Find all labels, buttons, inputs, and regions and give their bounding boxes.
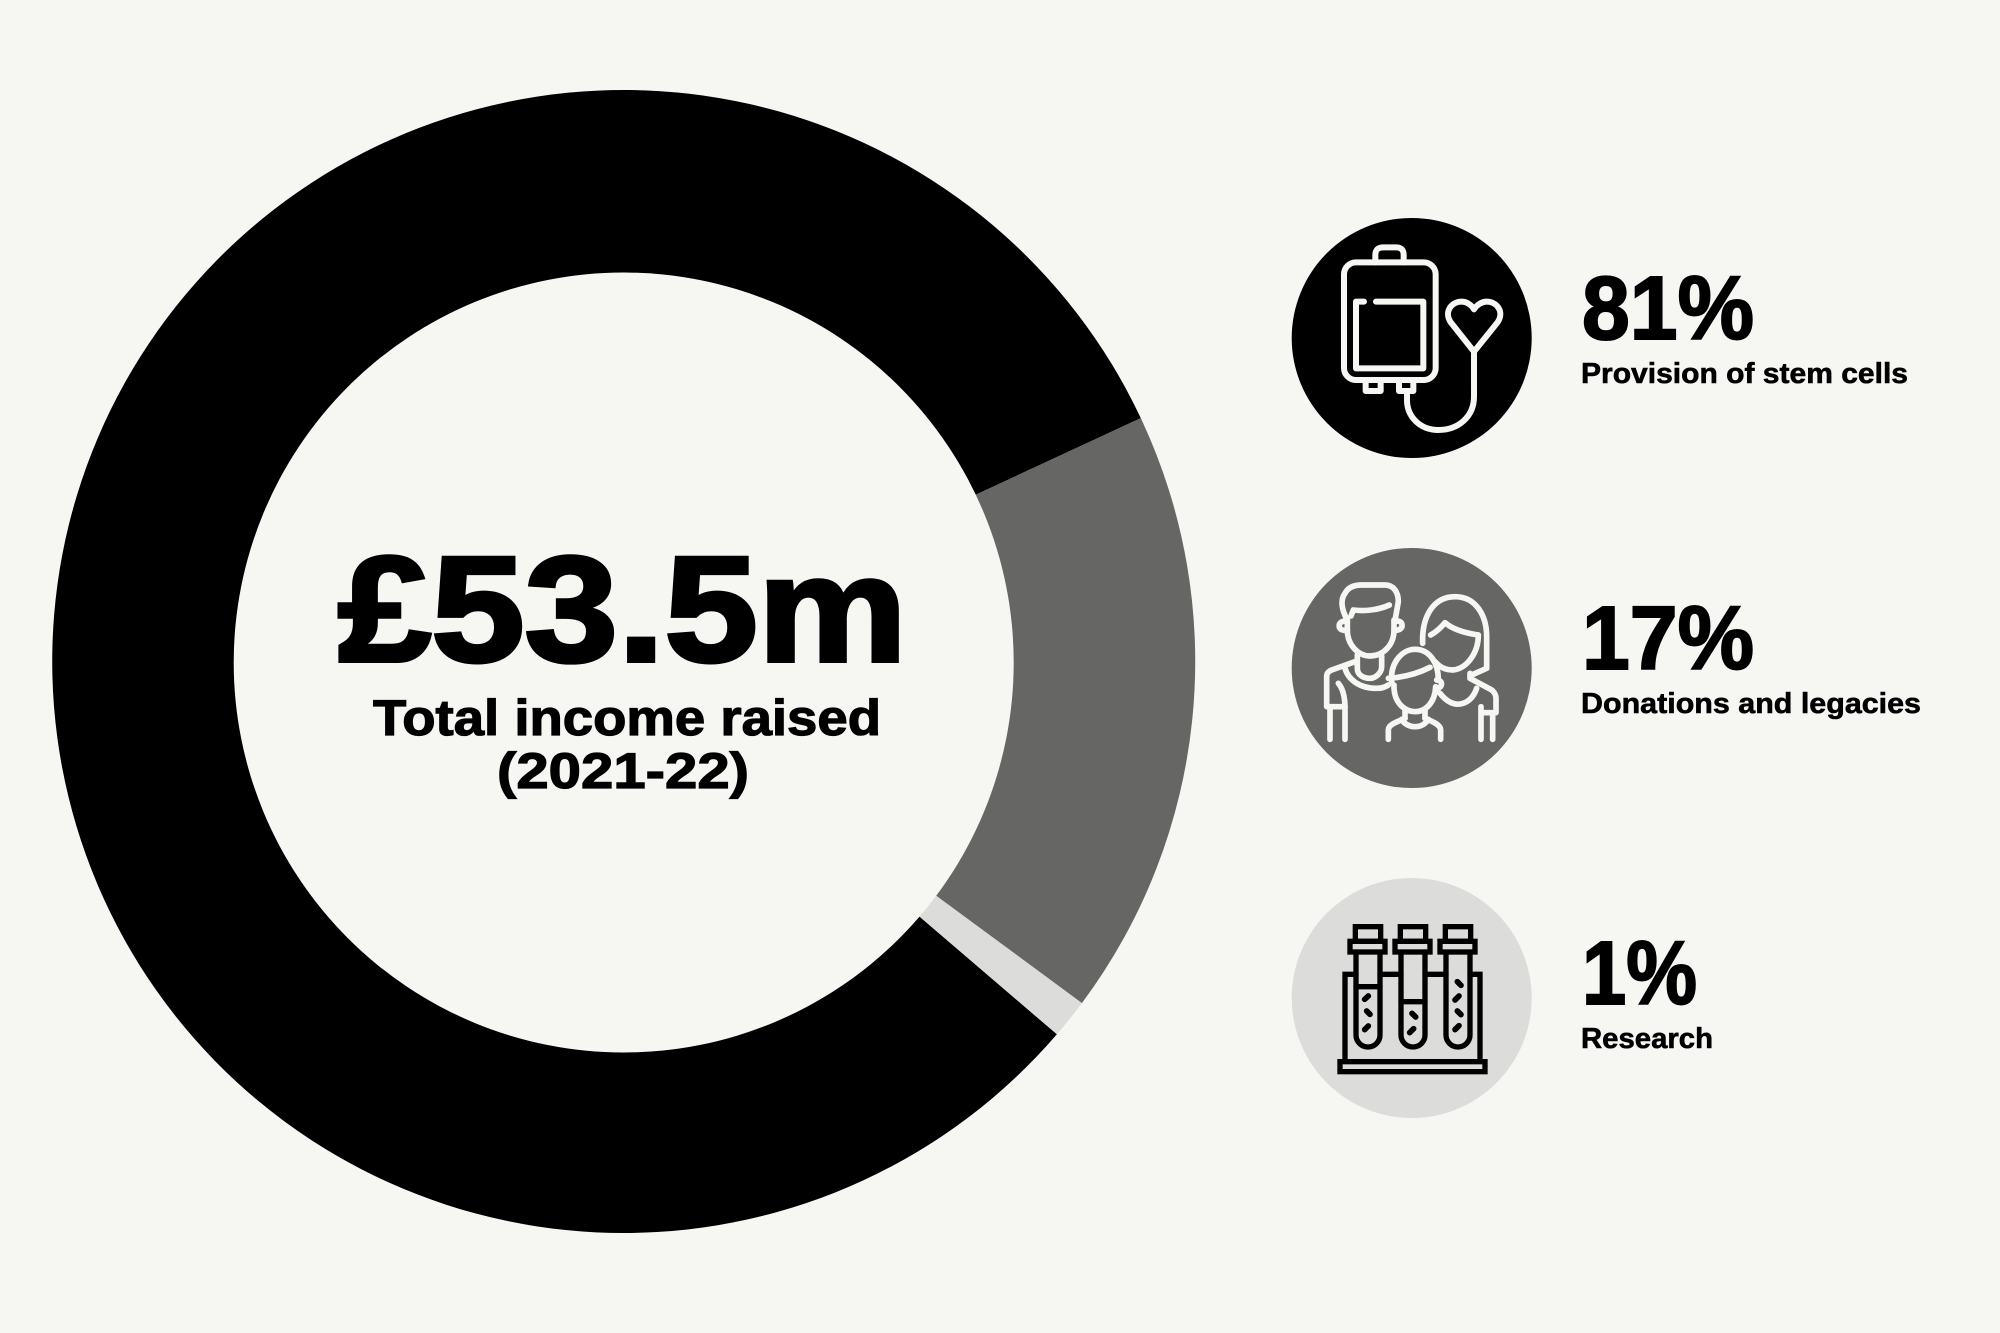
- stat: 1%: 1%: [1582, 924, 1697, 1024]
- icon: blood bag with heart: [1292, 218, 1532, 458]
- centre caption: Total income raised: [373, 690, 881, 746]
- segment: provision of stem cells 81%: [52, 90, 1141, 1233]
- icon: test tubes in rack: [1292, 878, 1532, 1118]
- centre caption: [373, 690, 881, 799]
- icon: family: [1292, 548, 1532, 788]
- label: donations and legacies: Donations and legacies: [1581, 688, 1921, 720]
- segment: research 1%: [905, 885, 1082, 1034]
- stat: 81%: 81%: [1582, 259, 1754, 359]
- label: provision of stem cells: Provision of stem cells: [1581, 358, 1908, 390]
- donut hole: [234, 272, 1014, 1052]
- centre caption: (2021-22): [497, 743, 749, 799]
- donut chart: [52, 90, 1195, 1233]
- segment: donations and legacies 17%: [921, 418, 1195, 1003]
- centre total figure: £53.5m: [338, 525, 907, 693]
- stat: 17%: 17%: [1582, 589, 1754, 689]
- label: research: Research: [1581, 1023, 1713, 1055]
